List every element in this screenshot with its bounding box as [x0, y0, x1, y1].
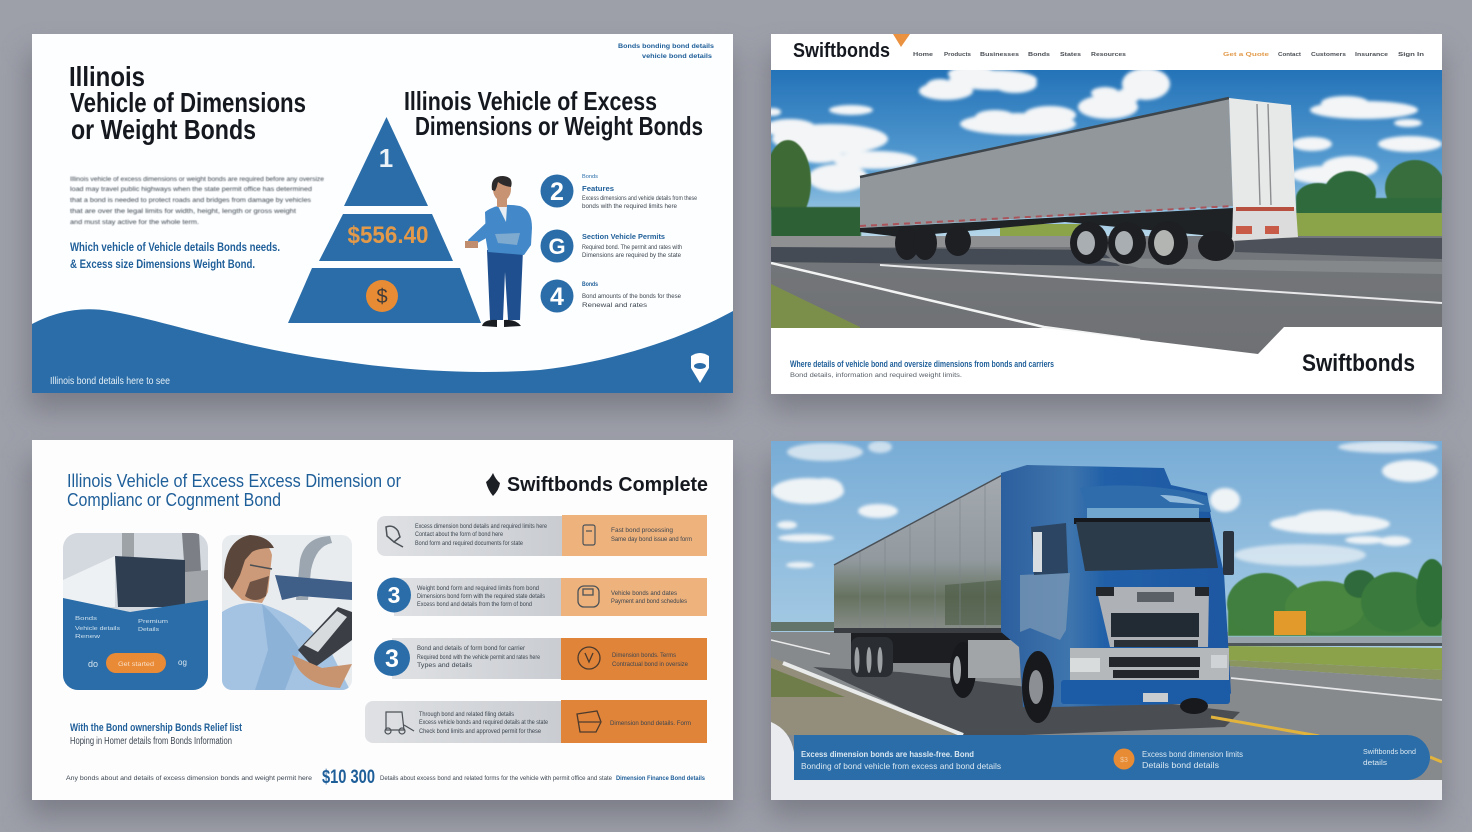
navigation right: Contact [1278, 52, 1301, 58]
heading: right title: Illinois Vehicle of Excess [404, 86, 657, 116]
truck [834, 465, 1234, 723]
item 4: Renewal and rates [582, 302, 648, 309]
footer strip: Details about excess bond and related forms for the vehicle with permit office and state [380, 775, 612, 782]
header logo: Swiftbonds [793, 40, 890, 62]
mirror [1223, 531, 1234, 575]
row 4: Through bond and related filing details [419, 711, 515, 718]
heading: left title: Illinois [69, 61, 145, 92]
blue callout: & Excess size Dimensions Weight Bond. [70, 257, 255, 271]
card button: Get started [118, 662, 154, 668]
side window [1031, 523, 1068, 575]
item 2: Bonds [582, 174, 598, 180]
info bar: Excess bond dimension limits [1142, 750, 1243, 759]
icon: orange badge: $3 [1120, 757, 1128, 764]
roof fairing highlight [1098, 486, 1211, 512]
far treeline [771, 622, 834, 631]
undercarriage [851, 633, 1021, 698]
side reflection [1020, 573, 1070, 640]
card text: Details [138, 627, 159, 633]
row 3: Required bond with the vehicle permit and rates here [417, 654, 540, 661]
footer text: Where details of vehicle bond and oversize dimensions from bonds and carriers [790, 359, 1054, 369]
badge 3 [377, 578, 411, 612]
body paragraph: and must stay active for the whole term. [70, 219, 199, 226]
info bar: Details bond details [1142, 761, 1219, 770]
item G [540, 230, 682, 262]
heading: left title: or Weight Bonds [71, 114, 256, 145]
note: Hoping in Homer details from Bonds Information [70, 736, 232, 747]
grass [1296, 213, 1442, 236]
body paragraph [70, 176, 324, 226]
item G: G [548, 234, 566, 259]
heading: left title: Vehicle of Dimensions [70, 87, 306, 118]
clouds [772, 441, 1438, 568]
icon: magnifier [386, 526, 403, 547]
footer text: Illinois bond details here to see [50, 376, 170, 387]
road edge lines [771, 263, 1140, 340]
info bar: Excess dimension bonds are hassle-free. Bond [801, 749, 974, 759]
row 2: Dimensions bond form with the required state details [417, 593, 546, 600]
navigation left: Home [913, 52, 933, 58]
item 2: 2 [550, 178, 564, 206]
pyramid amount: $556.40 [348, 222, 428, 249]
heading: Complianc or Cognment Bond [67, 490, 281, 510]
navigation right: Customers [1311, 52, 1346, 58]
trailer wheels [895, 221, 1234, 265]
logo: Swiftbonds Complete [507, 474, 708, 496]
row 4: Dimension bond details. Form [610, 720, 691, 727]
trailer [860, 98, 1298, 265]
info bar [771, 722, 1442, 800]
row 1: Fast bond processing [611, 527, 673, 534]
clouds [764, 66, 1442, 192]
left verge [771, 657, 960, 735]
note: With the Bond ownership Bonds Relief list [70, 722, 242, 734]
item 2: Features [582, 186, 614, 193]
navigation left: Resources [1091, 52, 1126, 58]
card button: do [88, 659, 98, 669]
icon: truck sketch [385, 712, 414, 734]
card button: og [178, 658, 187, 667]
bottom wave [32, 309, 733, 393]
blue callout: Which vehicle of Vehicle details Bonds needs. [70, 240, 280, 254]
row 2 [377, 578, 707, 616]
footer strip: Dimension Finance Bond details [616, 775, 705, 782]
item 4: 4 [550, 283, 564, 311]
navigation left: Products [944, 52, 971, 58]
footer text: Bond details, information and required weight limits. [790, 372, 962, 379]
illustration: businessman [465, 176, 532, 327]
icon: orange badge [1114, 748, 1134, 770]
item G: Required bond. The permit and rates with [582, 244, 682, 251]
icon: document [583, 525, 595, 545]
road [771, 236, 1442, 361]
item 4: Bonds [582, 282, 599, 288]
body paragraph: Illinois vehicle of excess dimensions or weight bonds are required before any oversize [70, 176, 324, 183]
row 3: Bond and details of form bond for carrier [417, 645, 526, 652]
body paragraph: that are over the legal limits for width, height, length or gross weight [70, 208, 296, 215]
icon: shield logo [691, 353, 709, 383]
photo: technician [222, 535, 352, 690]
navigation right: Sign In [1398, 52, 1425, 58]
badge 3: 3 [388, 582, 400, 608]
card text [75, 616, 169, 640]
road lines [771, 640, 1442, 762]
row 1: Contact about the form of bond here [415, 531, 503, 538]
info bar: Bonding of bond vehicle from excess and bond details [801, 761, 1001, 771]
row 1: Same day bond issue and form [611, 536, 692, 543]
truck wheels [1022, 651, 1208, 723]
item 4 [540, 280, 681, 312]
row 2: Vehicle bonds and dates [611, 590, 678, 597]
icon: clipboard [578, 586, 599, 607]
row 1 [377, 515, 707, 556]
note [70, 722, 242, 747]
item 2: bonds with the required limits here [582, 203, 677, 210]
row 1: Bond form and required documents for state [415, 540, 523, 547]
heading: Illinois Vehicle of Excess Excess Dimension or [67, 471, 401, 491]
body paragraph: load may travel public highways when the state permit office has determined [70, 186, 312, 193]
footer strip [66, 767, 705, 788]
navigation left: States [1060, 52, 1081, 58]
visor [1087, 508, 1199, 519]
row 3: Types and details [417, 662, 473, 669]
body paragraph: that a bond is needed to protect roads and bridges from damage by vehicles [70, 197, 312, 204]
heading [67, 471, 401, 510]
heading: right title: Dimensions or Weight Bonds [415, 111, 703, 141]
row 2: Excess bond and details from the form of bond [417, 601, 532, 608]
top right note: vehicle bond details [642, 53, 712, 60]
badge 3 [374, 640, 410, 676]
navigation left: Businesses [980, 52, 1019, 58]
row 3: Dimension bonds. Terms [612, 652, 677, 659]
roadside grass [1228, 646, 1442, 670]
card: blue photo card [63, 533, 208, 690]
row 3: Contractual bond in oversize [612, 661, 688, 668]
pyramid chart [288, 117, 481, 323]
road sign [1274, 611, 1306, 635]
badge 3: 3 [385, 645, 399, 673]
navigation right: Insurance [1355, 52, 1388, 58]
trailer [834, 472, 1008, 633]
row 4: Check bond limits and approved permit for these [419, 728, 541, 735]
item 2 [540, 174, 697, 210]
icon: dollar coin [366, 280, 398, 312]
amount: $10 300 [322, 767, 375, 788]
verge [771, 284, 860, 328]
photo: trailer on highway [764, 66, 1445, 361]
grille panel [1096, 587, 1209, 647]
item 4: Bond amounts of the bonds for these [582, 293, 681, 300]
road [771, 632, 1442, 780]
icon: seal [578, 647, 600, 669]
cab body [1001, 465, 1231, 707]
item 2: Excess dimensions and vehicle details from these [582, 195, 697, 202]
panel: pyramid infographic [32, 34, 733, 393]
navigation left: Bonds [1028, 52, 1050, 58]
heading: right title [404, 86, 703, 141]
heading: left title [69, 61, 306, 145]
footer text [790, 359, 1054, 379]
trees [765, 140, 1445, 237]
panel: Swiftbonds trailer [764, 34, 1445, 394]
icon: orange marker [893, 34, 910, 47]
card text: Premium [138, 619, 169, 625]
info bar: Swiftbonds bond [1363, 749, 1416, 756]
blue callout [70, 240, 280, 271]
icon: bag [577, 711, 601, 732]
row 2: Weight bond form and required limits from bond [417, 585, 539, 592]
row 3 [374, 638, 707, 680]
row 4: Excess vehicle bonds and required details at the state [419, 719, 548, 726]
item G: Section Vehicle Permits [582, 232, 665, 241]
card text: Bonds [75, 616, 97, 622]
card button [88, 653, 187, 673]
footer logo: Swiftbonds [1302, 350, 1415, 377]
panel: blue truck photo [771, 441, 1448, 800]
navigation left [913, 52, 1126, 58]
card text: Vehicle details [75, 626, 120, 632]
trees [1227, 559, 1448, 636]
top right note: Bonds bonding bond details [618, 43, 714, 50]
pyramid number 1: 1 [379, 143, 393, 173]
item G: Dimensions are required by the state [582, 252, 681, 259]
guard rail [1228, 637, 1442, 646]
navigation right [1223, 52, 1425, 58]
bumper [1061, 648, 1230, 704]
white footer shape [771, 327, 1442, 394]
footer strip: Any bonds about and details of excess dimension bonds and weight permit here [66, 775, 312, 782]
panel: compliance [32, 440, 733, 800]
info bar: details [1363, 760, 1388, 767]
icon: dollar coin: $ [376, 286, 388, 308]
navigation right: Get a Quote [1223, 52, 1269, 58]
windshield [1076, 522, 1218, 571]
row 2: Payment and bond schedules [611, 598, 688, 605]
card text: Renew [75, 634, 100, 640]
top right note [618, 43, 714, 60]
row 1: Excess dimension bond details and required limits here [415, 523, 547, 530]
row 4 [365, 700, 707, 743]
